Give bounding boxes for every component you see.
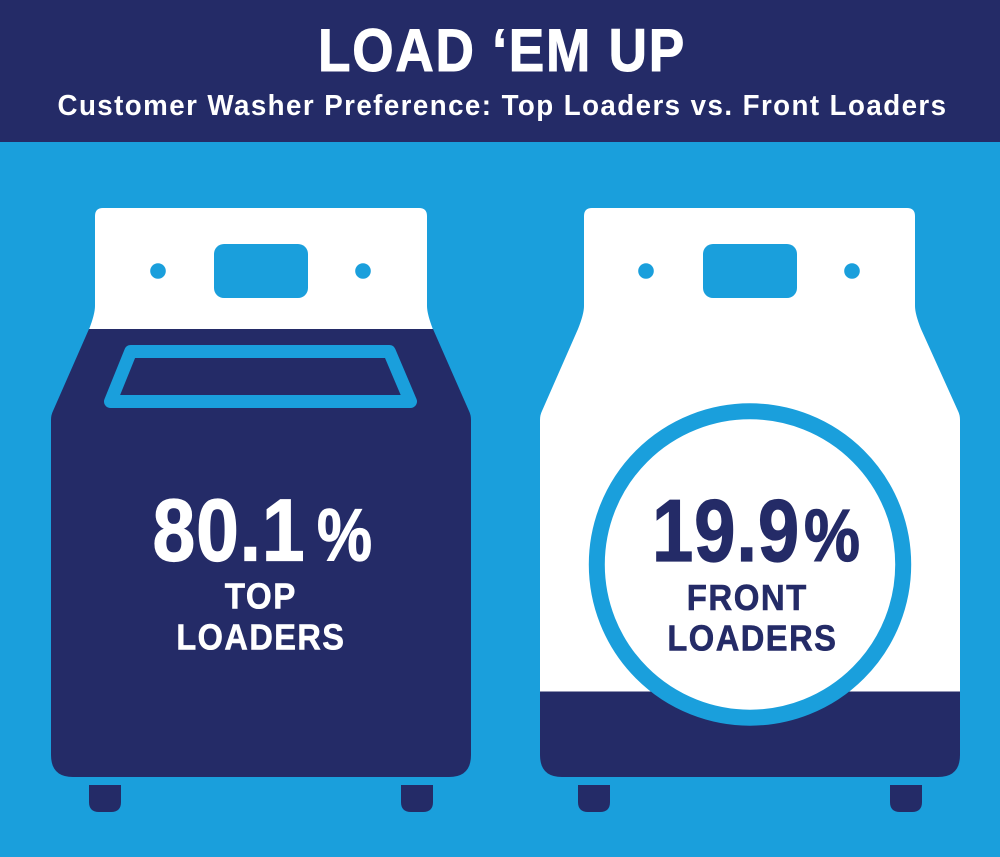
washer body xyxy=(540,208,960,692)
top loader label xyxy=(176,576,345,658)
knobs xyxy=(638,263,654,279)
top loader label: LOADERS xyxy=(176,616,345,658)
feet xyxy=(578,785,610,812)
display xyxy=(214,244,308,298)
top loader percentage: 80.1 xyxy=(152,480,306,580)
front loader percentage: % xyxy=(804,494,860,577)
panel: top loader washer xyxy=(51,208,471,812)
feet xyxy=(89,785,121,812)
front loader percentage: 19.9 xyxy=(652,481,800,580)
header band xyxy=(0,0,1000,142)
front loader label: LOADERS xyxy=(667,618,837,658)
knobs xyxy=(150,263,166,279)
washer control panel xyxy=(89,208,433,330)
top loader label: TOP xyxy=(225,576,297,616)
door xyxy=(597,411,903,718)
washer body xyxy=(51,329,471,777)
front loader label xyxy=(667,577,837,658)
panel: front loader washer xyxy=(540,208,960,812)
washer base xyxy=(540,692,960,777)
subtitle: Customer Washer Preference: Top Loaders vs. Front Loaders xyxy=(58,90,948,122)
front loader label: FRONT xyxy=(687,577,808,618)
title: LOAD ‘EM UP xyxy=(318,17,686,84)
top loader percentage: % xyxy=(317,494,372,576)
display xyxy=(703,244,797,298)
lid xyxy=(110,352,410,402)
